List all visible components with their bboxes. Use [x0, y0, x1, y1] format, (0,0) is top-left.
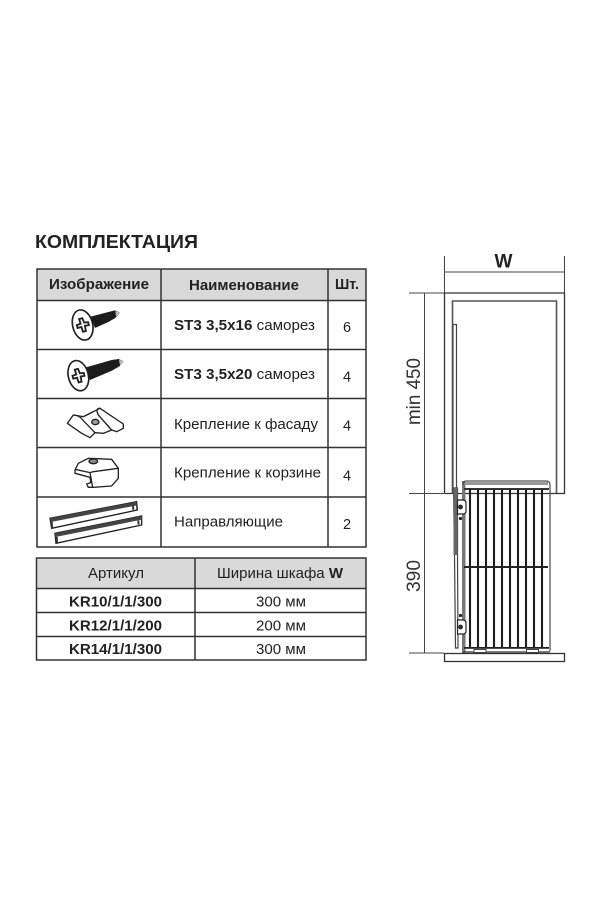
basket door panel [453, 324, 456, 493]
icon: basket clip [75, 458, 118, 487]
icon: guide rails [50, 502, 142, 543]
article header background [36, 558, 366, 588]
basket bottom clips [474, 650, 538, 652]
quantity: 4: 4 [343, 370, 351, 386]
item name: screw 16: ST3 3,5x16 саморез [174, 318, 315, 334]
article header labels: Ширина шкафа W [217, 566, 343, 582]
table: article numbers [36, 558, 366, 660]
dimension label: W: W [495, 252, 513, 272]
icon: screw 16 [69, 308, 120, 342]
quantity: 4: 4 [343, 468, 351, 484]
icon: facade clip [67, 408, 123, 438]
quantity: 4: 4 [343, 418, 351, 434]
article row 1: 300 мм [256, 594, 306, 610]
article row 3: 300 мм [256, 642, 306, 658]
article row 2: KR12/1/1/200 [69, 618, 162, 634]
basket wire bars [470, 489, 542, 648]
upper hinge [458, 500, 466, 520]
dimension label: 390: 390 [404, 560, 425, 592]
table header background [37, 269, 366, 300]
dimension label: min 450: min 450 [404, 358, 425, 425]
cabinet outline [444, 293, 564, 494]
article row 2: 200 мм [256, 618, 306, 634]
basket frame [462, 481, 550, 653]
header labels: Наименование [189, 278, 299, 294]
cabinet inner wall [452, 301, 556, 493]
icon: screw 20 [65, 358, 124, 393]
article row 1 [69, 594, 306, 610]
title: КОМПЛЕКТАЦИЯ [35, 231, 198, 252]
lower hinge [458, 614, 466, 634]
facade rod [454, 488, 458, 648]
article row 2 [69, 618, 306, 634]
item name: guide rails: Направляющие [174, 514, 283, 530]
article row 3: KR14/1/1/300 [69, 642, 162, 658]
quantity: 2: 2 [343, 517, 351, 533]
quantity: 6: 6 [343, 320, 351, 336]
diagram: cabinet with pull-out basket [404, 252, 564, 662]
dimension lines [409, 256, 564, 653]
article row 1: KR10/1/1/300 [69, 594, 162, 610]
item name: facade clip: Крепление к фасаду [174, 417, 319, 433]
table: contents [37, 269, 366, 547]
header labels: Изображение [49, 277, 149, 293]
article header labels [88, 566, 343, 582]
header labels: Шт. [335, 277, 359, 293]
item name: screw 20: ST3 3,5x20 саморез [174, 367, 315, 383]
item name: basket clip: Крепление к корзине [174, 466, 321, 482]
article row 3 [69, 642, 306, 658]
article header labels: Артикул [88, 566, 144, 582]
header labels [49, 277, 359, 294]
base plate [444, 654, 564, 662]
